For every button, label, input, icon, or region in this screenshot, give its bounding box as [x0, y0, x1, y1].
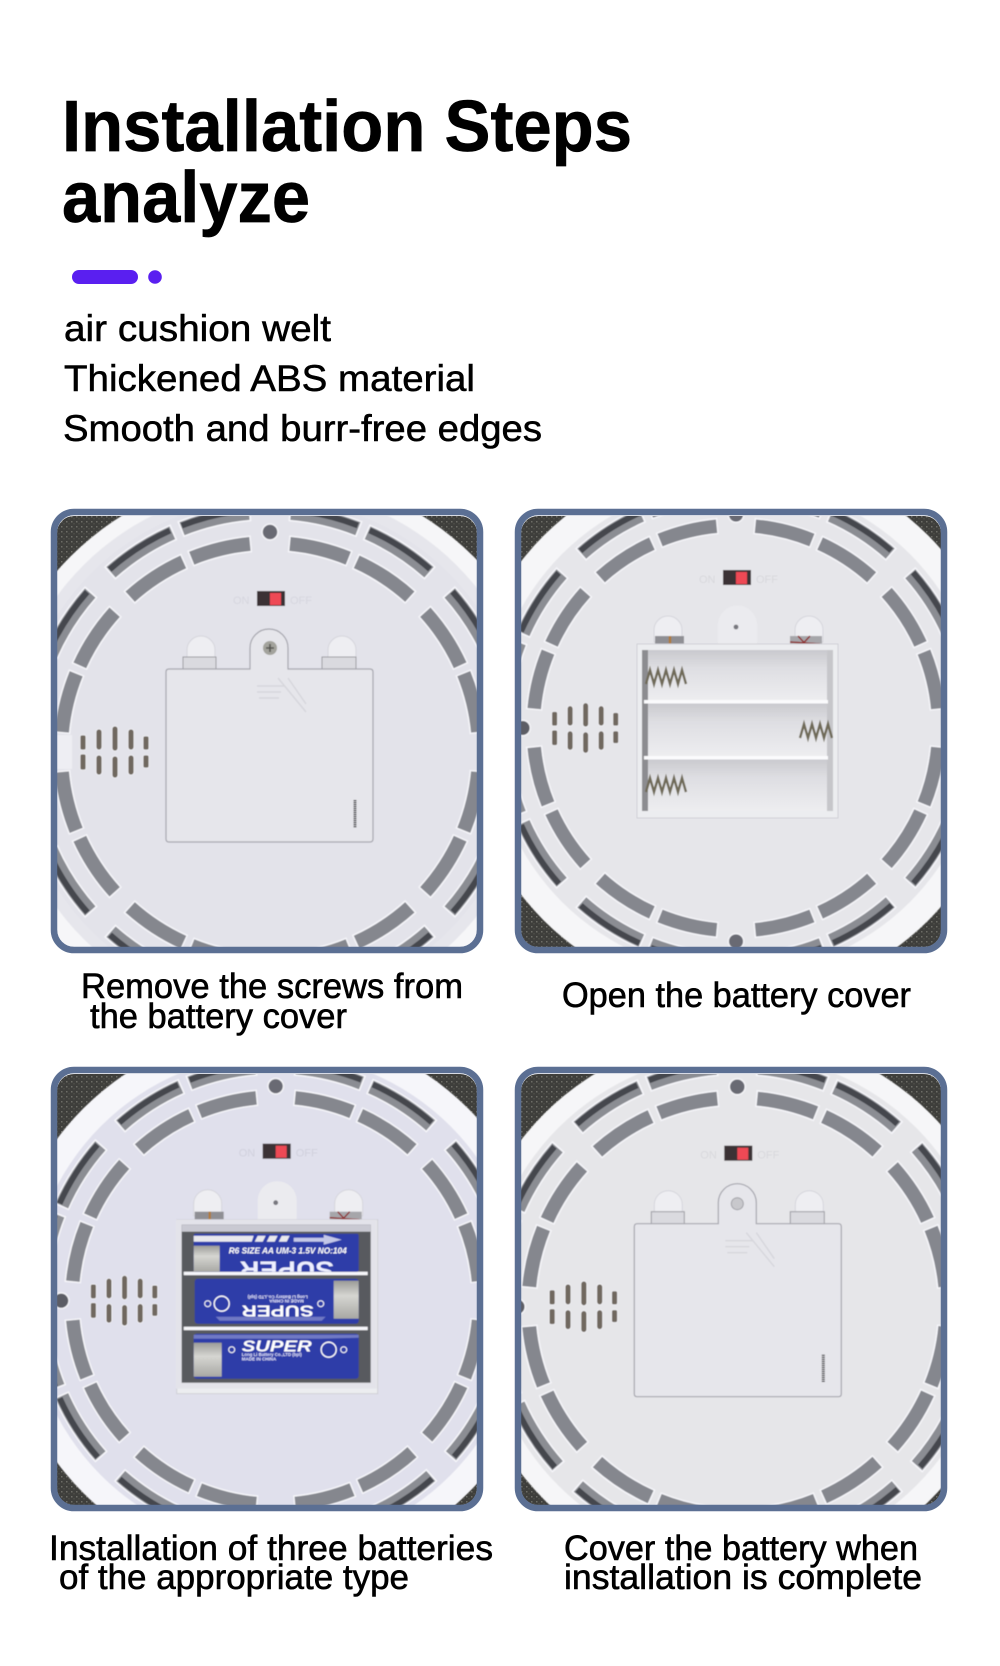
icon: speaker vents — [552, 703, 619, 753]
battery 3: SUPER — [242, 1339, 312, 1356]
feature: thickened ABS material: Thickened ABS material — [64, 357, 475, 399]
icon: power switch: ON — [233, 595, 250, 607]
battery 1 — [192, 1233, 360, 1272]
battery compartment with batteries — [176, 1181, 378, 1394]
caption: step 1: the battery cover — [90, 997, 347, 1036]
battery 2 — [195, 1279, 359, 1324]
battery 2: SUPER — [241, 1302, 314, 1319]
caption: step 3: Installation of three batteries — [49, 1529, 493, 1568]
icon: power switch — [700, 1146, 780, 1162]
caption: step 3: of the appropriate type — [59, 1558, 409, 1597]
icon: power switch — [239, 1144, 318, 1160]
icon: power switch: ON — [699, 574, 716, 586]
caption: step 4: Cover the battery when — [564, 1529, 918, 1568]
accent mark — [72, 270, 162, 284]
icon: spring 1 — [646, 670, 686, 684]
icon: power switch: OFF — [757, 1150, 780, 1162]
feature list — [63, 307, 542, 449]
caption: step 4: installation is complete — [564, 1558, 922, 1597]
panel: step 4 closed cover photo — [514, 1066, 948, 1512]
title — [62, 87, 632, 238]
battery 3: Long Li Battery Co.,LTD (bpl) — [242, 1352, 302, 1357]
panel: step 3 install batteries photo — [50, 1066, 484, 1512]
title line 1: Installation Steps — [62, 87, 632, 167]
title line 2: analyze — [62, 158, 310, 238]
battery 2: Long Li Battery Co.,LTD (bpl) — [247, 1295, 308, 1300]
empty battery compartment — [637, 606, 838, 818]
icon: speaker vents — [80, 726, 149, 778]
battery 1: R6 SIZE AA UM-3 1.5V NO:104 — [229, 1246, 347, 1256]
battery cover closed — [634, 1184, 841, 1397]
caption: step 3 — [49, 1529, 493, 1597]
icon: power switch: ON — [239, 1148, 255, 1160]
battery cover with screw — [166, 629, 373, 842]
icon: power switch — [699, 570, 778, 586]
icon: power switch: OFF — [756, 574, 778, 586]
battery 2: MADE IN CHINA — [268, 1299, 304, 1304]
battery 1: SUPER — [240, 1256, 334, 1283]
icon: power switch — [240, 590, 308, 606]
icon: speaker vents — [90, 1275, 158, 1326]
icon: power switch: ON — [700, 1150, 717, 1162]
feature: smooth edges: Smooth and burr-free edges — [63, 407, 542, 449]
icon: spring 2 — [800, 724, 832, 738]
icon: spring 3 — [646, 778, 686, 792]
icon: power switch: OFF — [290, 595, 312, 607]
caption: step 1 — [81, 967, 463, 1036]
feature: air cushion welt: air cushion welt — [64, 307, 332, 349]
caption: step 2: Open the battery cover — [562, 976, 911, 1015]
battery 3: MADE IN CHINA — [242, 1357, 277, 1362]
caption: step 1: Remove the screws from — [81, 967, 463, 1006]
panel: step 1 remove screws photo — [50, 508, 484, 954]
icon: speaker vents — [549, 1281, 618, 1332]
caption: step 4 — [564, 1529, 922, 1597]
icon: power switch: OFF — [296, 1148, 318, 1160]
battery 3 — [194, 1334, 359, 1379]
panel: step 2 open cover photo — [514, 508, 948, 954]
